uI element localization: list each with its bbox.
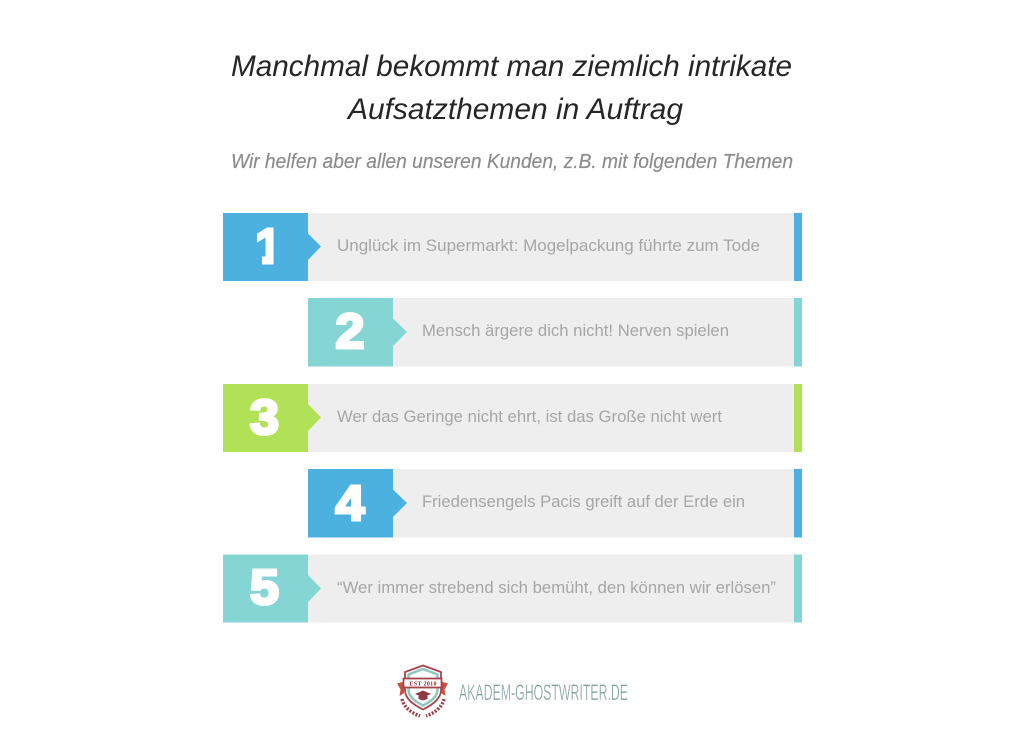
panel: row 2: Mensch ärgere dich nicht! Nerven spielen [422,321,729,340]
title: Manchmal bekommt man ziemlich intrikate [231,50,792,83]
panel: row 5: 5 [250,561,279,615]
panel: row 3 [223,384,802,452]
logo wordmark: AKADEM-GHOSTWRITER.DE [459,680,628,705]
panel: row 2 [308,298,802,366]
panel: row 5 [223,554,802,622]
icon: shield crest [397,666,448,716]
panel: row 1 [223,213,802,281]
logo [397,666,628,716]
panel: row 3: Wer das Geringe nicht ehrt, ist das Große nicht wert [337,407,722,426]
panel: row 4: Friedensengels Pacis greift auf der Erde ein [422,492,745,511]
title: Aufsatzthemen in Auftrag [346,93,683,126]
title [231,50,792,126]
icon: shield crest: EST 2010 [410,682,436,688]
panel: row 2: 2 [336,305,364,359]
panel: row 4 [308,469,802,538]
subtitle: Wir helfen aber allen unseren Kunden, z.B. mit folgenden Themen [231,151,793,173]
panel: row 1: Unglück im Supermarkt: Mogelpackung führte zum Tode [337,236,760,255]
panel: row 4: 4 [336,477,364,531]
panel: row 5: “Wer immer strebend sich bemüht, den können wir erlösen” [337,578,776,597]
panel: row 1: 1 [255,220,284,274]
panel: row 3: 3 [250,391,279,445]
